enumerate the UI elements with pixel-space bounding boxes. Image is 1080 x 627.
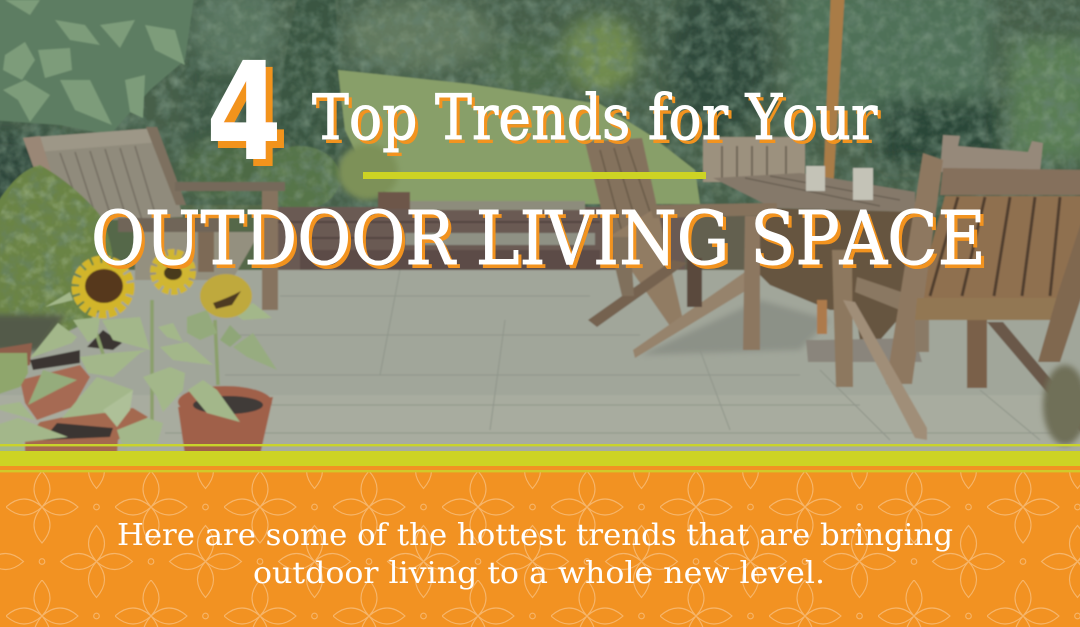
left chair <box>585 138 657 237</box>
fig tree leaves <box>0 0 195 135</box>
orange panel with flower pattern <box>0 466 1080 627</box>
paving <box>0 270 1080 460</box>
foliage backdrop <box>0 0 1080 280</box>
right table and chairs <box>585 135 1080 440</box>
table top <box>713 173 915 212</box>
back chair <box>703 137 805 182</box>
under table shade <box>760 208 915 340</box>
cups <box>806 166 873 200</box>
right back chair <box>940 135 1043 172</box>
photo: garden patio background <box>0 0 1080 460</box>
sunflower plants and pots <box>0 254 277 455</box>
lawn <box>338 70 700 204</box>
thin lime line over photo <box>0 444 1080 446</box>
sunflower 3 <box>200 274 252 318</box>
intro text: Here are some of the hottest trends that are bringing <box>117 518 953 552</box>
leaves <box>0 292 277 455</box>
thin lime line <box>0 470 1080 472</box>
title: numeral 4: 4 <box>206 34 282 192</box>
small right plant <box>1043 365 1080 445</box>
intro text <box>117 518 953 590</box>
intro text: outdoor living to a whole new level. <box>253 556 825 590</box>
stems <box>95 300 220 420</box>
sunflower 2 <box>155 254 191 290</box>
lime band <box>0 451 1080 466</box>
umbrella pole <box>823 0 845 192</box>
title: top line: Top Trends for Your <box>312 81 877 154</box>
heading rule <box>363 172 706 179</box>
conifer tree <box>280 0 340 155</box>
low wall and steps <box>265 192 685 272</box>
pots <box>20 365 90 420</box>
left shrub <box>0 160 120 352</box>
table pole base <box>817 300 827 334</box>
round bush <box>260 146 340 210</box>
left bench <box>23 127 285 310</box>
front chair <box>854 277 901 310</box>
title: main line: OUTDOOR LIVING SPACE <box>91 196 986 282</box>
plant by lawn <box>338 144 398 200</box>
sunflower 1 <box>78 262 128 312</box>
